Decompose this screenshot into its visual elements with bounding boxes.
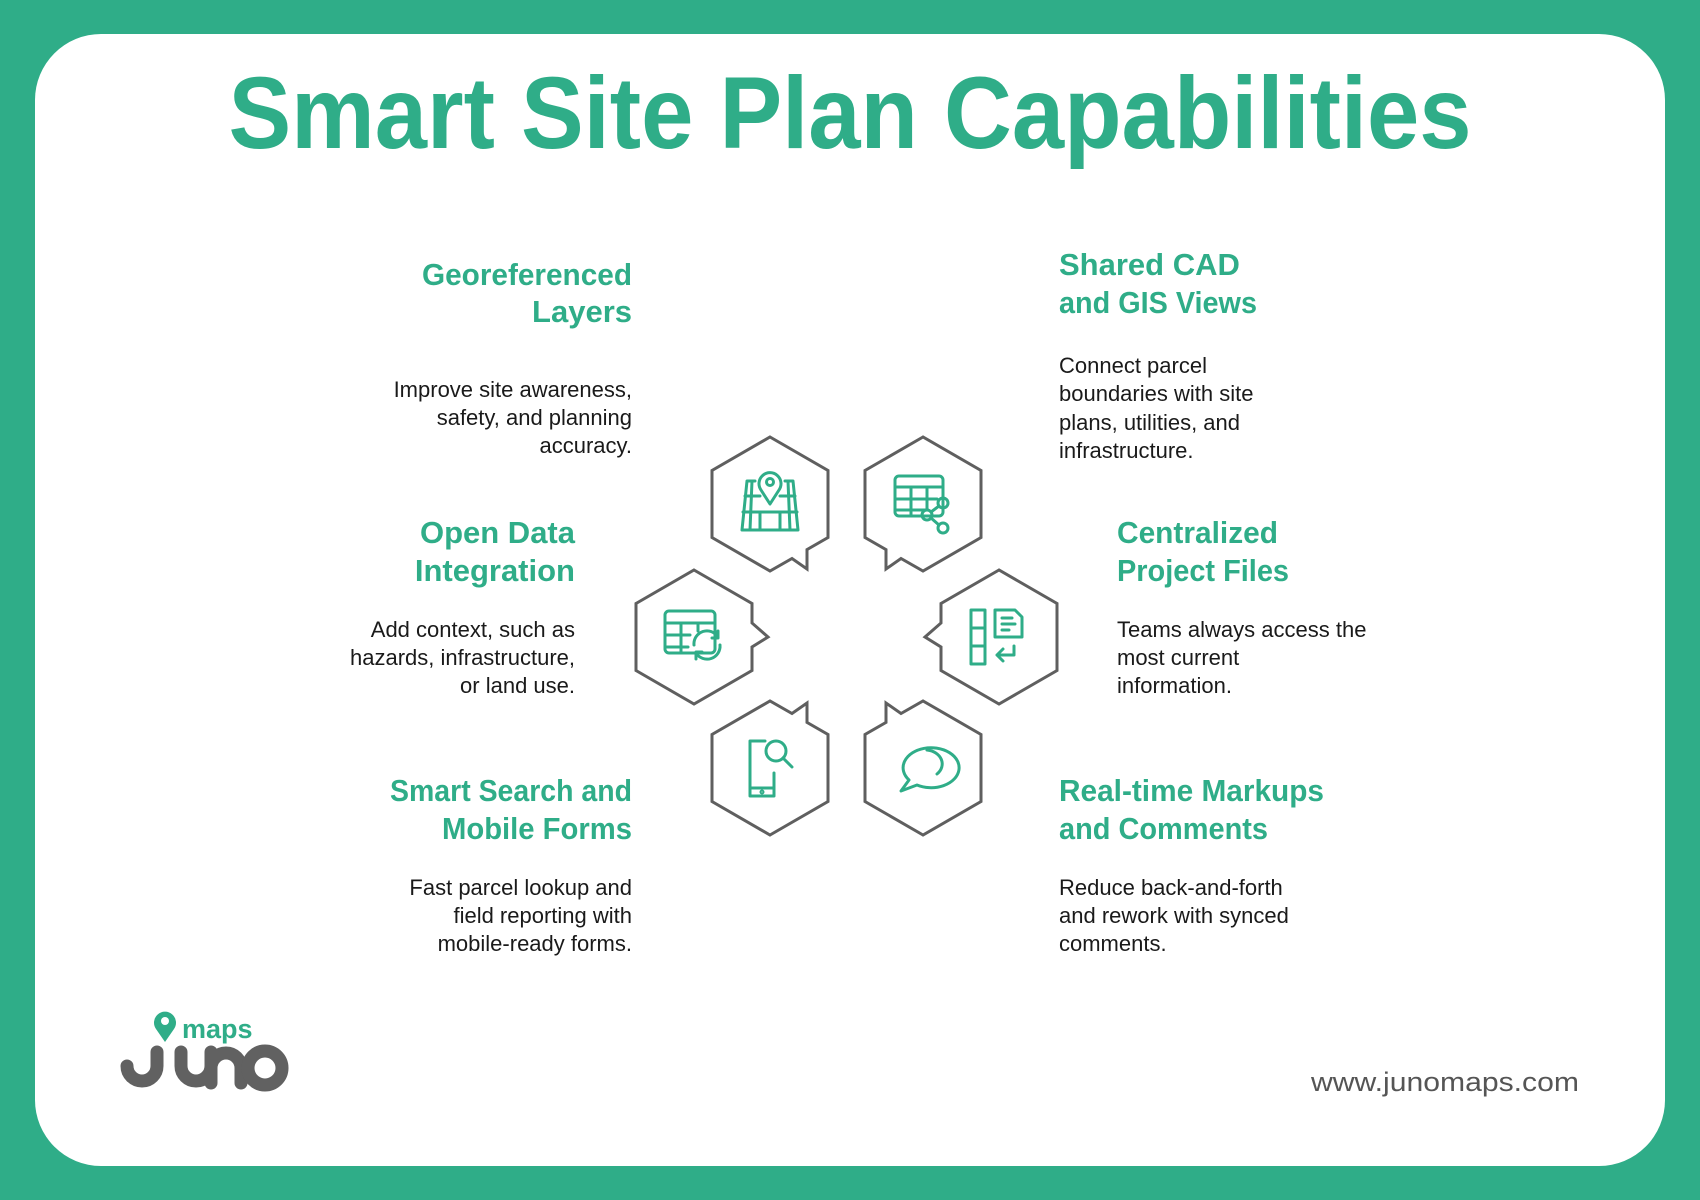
icon: table with share: [895, 476, 948, 533]
block: Georeferenced Layers: Layers: [532, 294, 632, 329]
block: Centralized Project Files: Teams always access the: [1117, 617, 1366, 642]
block: Open Data Integration: Open Data: [420, 515, 576, 550]
block: Centralized Project Files: [1117, 515, 1366, 698]
block: Shared CAD and GIS Views: [1059, 247, 1257, 463]
block: Real-time Markups and Comments: and Comments: [1059, 811, 1268, 846]
title: Smart Site Plan Capabilities: [228, 56, 1472, 170]
block: Real-time Markups and Comments: Reduce back-and-forth: [1059, 875, 1283, 900]
block: Centralized Project Files: Project Files: [1117, 553, 1289, 588]
block: Centralized Project Files: Centralized: [1117, 515, 1278, 550]
icon: table with sync: [665, 611, 720, 659]
block: Georeferenced Layers: Georeferenced: [422, 257, 632, 292]
block: Georeferenced Layers: accuracy.: [539, 433, 632, 458]
block: Shared CAD and GIS Views: plans, utilities, and: [1059, 410, 1240, 435]
icon: speech bubble: [901, 748, 959, 791]
block: Shared CAD and GIS Views: boundaries with site: [1059, 381, 1253, 406]
block: Shared CAD and GIS Views: Connect parcel: [1059, 353, 1207, 378]
block: Real-time Markups and Comments: [1059, 773, 1324, 956]
icon: pin: [154, 1012, 176, 1042]
block: Open Data Integration: or land use.: [460, 673, 575, 698]
url: www.junomaps.com: [1310, 1067, 1579, 1097]
block: Centralized Project Files: information.: [1117, 673, 1232, 698]
block: Open Data Integration: Add context, such as: [371, 617, 575, 642]
block: Real-time Markups and Comments: and rework with synced: [1059, 903, 1289, 928]
hexagon: comments: [865, 701, 981, 835]
logo: juno maps: maps: [182, 1014, 253, 1044]
block: Open Data Integration: [350, 515, 576, 698]
block: Smart Search and Mobile Forms: field reporting with: [453, 903, 632, 928]
block: Smart Search and Mobile Forms: [390, 773, 632, 956]
icon: phone with magnifier: [750, 741, 792, 796]
block: Shared CAD and GIS Views: and GIS Views: [1059, 285, 1257, 320]
block: Real-time Markups and Comments: comments.: [1059, 931, 1167, 956]
block: Shared CAD and GIS Views: infrastructure.: [1059, 438, 1194, 463]
icon: map with pin: [742, 473, 798, 530]
logo: juno maps: [127, 1012, 282, 1085]
hexagon: files: [925, 570, 1057, 704]
block: Smart Search and Mobile Forms: mobile-ready forms.: [438, 931, 632, 956]
block: Smart Search and Mobile Forms: Smart Search and: [390, 773, 632, 808]
block: Centralized Project Files: most current: [1117, 645, 1239, 670]
block: Open Data Integration: Integration: [415, 553, 575, 588]
block: Open Data Integration: hazards, infrastructure,: [350, 645, 575, 670]
block: Smart Search and Mobile Forms: Fast parcel lookup and: [409, 875, 632, 900]
icon: columns and document: [971, 610, 1022, 664]
block: Real-time Markups and Comments: Real-time Markups: [1059, 773, 1324, 808]
hexagon: mobile search: [712, 701, 828, 835]
block: Georeferenced Layers: [394, 257, 632, 458]
block: Smart Search and Mobile Forms: Mobile Forms: [442, 811, 632, 846]
hexagon: map pin: [712, 437, 828, 571]
hexagon: table share: [865, 437, 981, 571]
block: Georeferenced Layers: Improve site awareness,: [394, 377, 632, 402]
block: Shared CAD and GIS Views: Shared CAD: [1059, 247, 1240, 282]
block: Georeferenced Layers: safety, and planning: [437, 405, 632, 430]
hexagon: table sync: [636, 570, 768, 704]
